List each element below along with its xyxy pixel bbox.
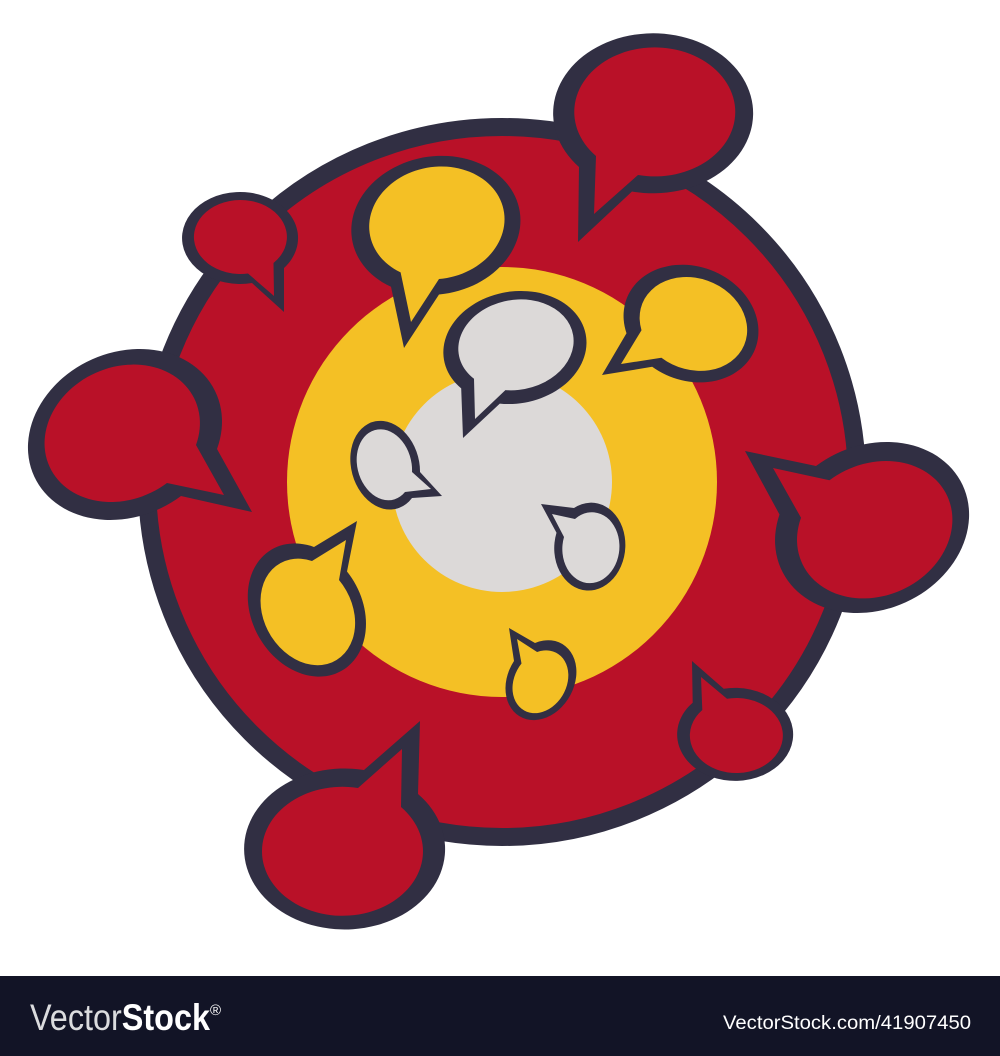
bubble: upper right yellow [602, 265, 758, 382]
bubble: lower right small red [677, 661, 793, 781]
footer bar [0, 976, 1000, 1056]
bubble: lower left yellow [248, 521, 366, 677]
concentric target circles [147, 127, 857, 837]
bubble: right red [745, 442, 969, 613]
footer logo: VectorStock [30, 997, 210, 1038]
bubble: top yellow [351, 156, 520, 348]
bubble: bottom small yellow [505, 628, 576, 720]
footer url: VectorStock.com/41907450 [723, 1013, 971, 1034]
bubble: center right grey [541, 503, 625, 591]
bubble: center left grey [350, 421, 442, 510]
registered mark: ® [210, 1002, 221, 1019]
bubble: top right red [553, 33, 753, 242]
bubble: center top grey [443, 291, 586, 438]
bubble: left red [28, 349, 252, 520]
bubble: bottom left red [244, 721, 445, 929]
bubble: upper left small red [182, 192, 298, 312]
